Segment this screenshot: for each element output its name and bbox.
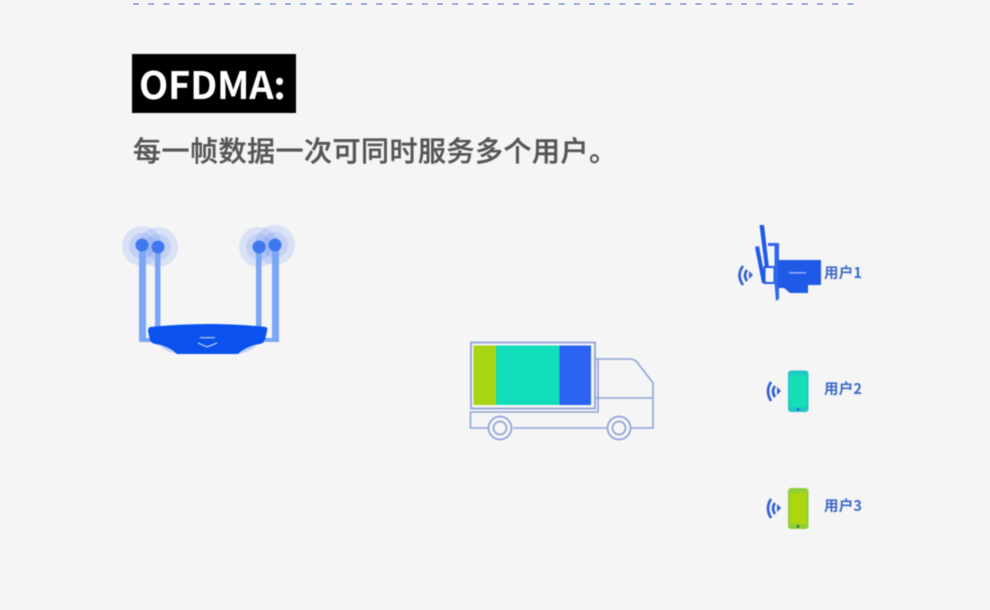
icon: delivery truck carrying colored frame	[469, 341, 654, 441]
top dashed divider	[133, 3, 854, 5]
antennas	[760, 225, 769, 268]
cargo: user 3 block	[474, 346, 496, 405]
wifi signal	[768, 499, 775, 518]
cargo: user 2 block	[496, 346, 560, 405]
label: user 3: 用户3	[824, 495, 862, 516]
subtitle text: 每一帧数据一次可同时服务多个用户。	[133, 130, 618, 170]
heading: OFDMA label: OFDMA:	[139, 55, 286, 110]
cargo: user 1 block	[560, 346, 591, 405]
signal halos	[122, 225, 295, 267]
wifi signal	[768, 382, 775, 401]
user 3: green phone with signal	[766, 487, 810, 530]
antenna mount	[764, 267, 774, 283]
user 2: teal phone with signal	[766, 370, 810, 413]
bracket	[768, 243, 779, 301]
antenna tips	[136, 238, 282, 254]
icon: router with four antennas	[122, 224, 296, 355]
circuit board	[778, 260, 821, 293]
cab and chassis	[470, 359, 653, 428]
label: user 2: 用户2	[824, 378, 862, 399]
router shadow	[160, 346, 256, 354]
user 1: wireless adapter card with signal	[737, 224, 822, 302]
rear wheel	[608, 416, 630, 440]
router logo and chevron	[200, 337, 215, 338]
board label	[789, 272, 806, 274]
phone body	[788, 488, 808, 529]
router body	[148, 324, 267, 354]
label: user 1: 用户1	[824, 262, 862, 283]
phone body	[788, 370, 808, 412]
front wheel	[488, 416, 512, 440]
wifi signal	[740, 266, 747, 285]
cargo box outline	[471, 342, 595, 408]
antennas	[139, 245, 279, 342]
